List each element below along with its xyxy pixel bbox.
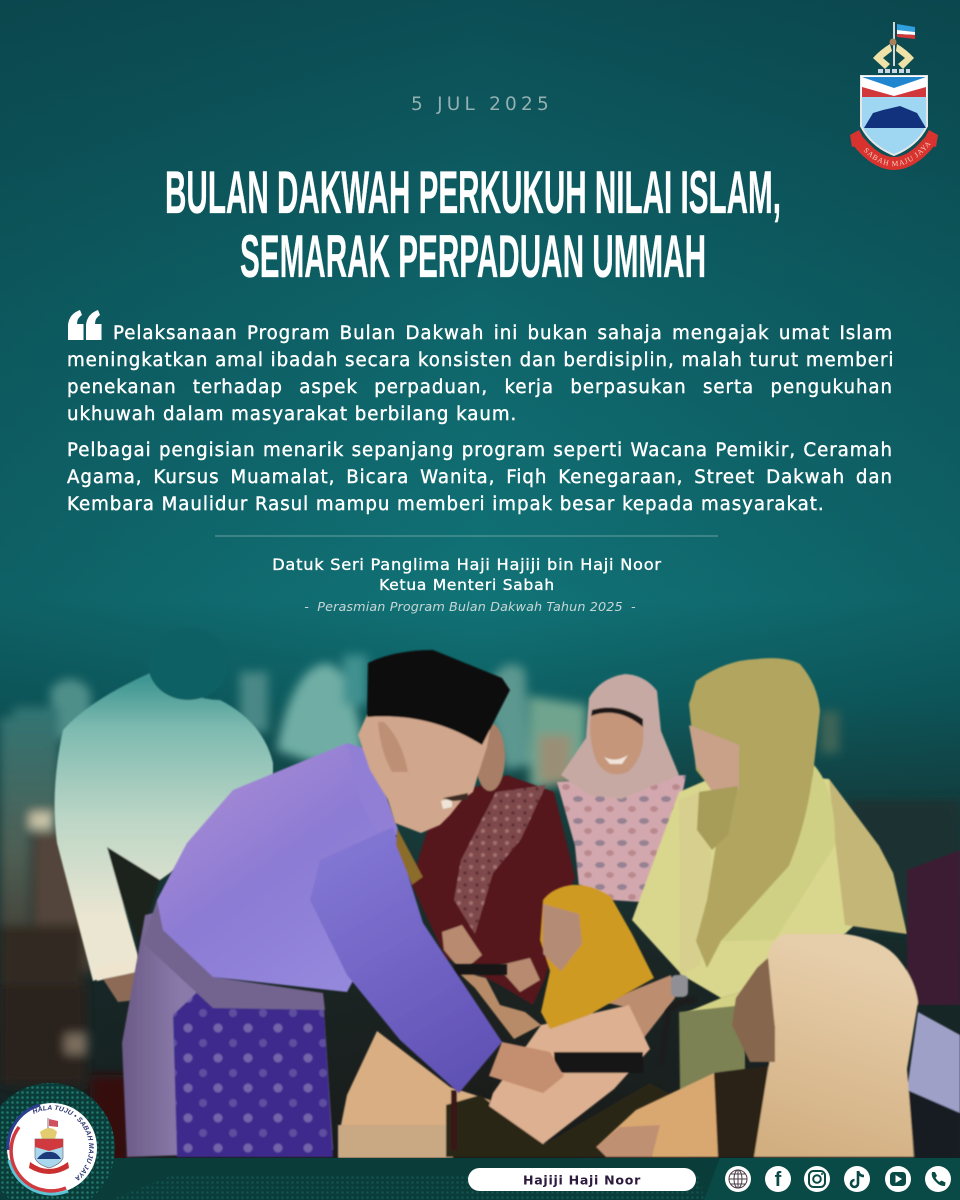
icon: instagram — [804, 1166, 830, 1192]
name pill: Hajiji Haji Noor — [523, 1172, 641, 1188]
tinted crowd in the background — [0, 655, 960, 1165]
title — [165, 159, 781, 290]
icon: facebook — [765, 1166, 791, 1192]
lady in green-yellow hijab — [604, 658, 907, 1075]
icon: globe — [725, 1166, 751, 1192]
quote text: penekanan terhadap aspek perpaduan, kerja berpasukan serta pengukuhan — [67, 377, 893, 398]
icon: youtube — [885, 1166, 911, 1192]
attribution: Ketua Menteri Sabah — [379, 576, 555, 594]
quotation mark — [68, 310, 102, 340]
quote text: Pelbagai pengisian menarik sepanjang program seperti Wacana Pemikir, Ceramah — [67, 440, 893, 461]
footer bar — [0, 1158, 960, 1200]
attribution: Datuk Seri Panglima Haji Hajiji bin Haji Noor — [272, 555, 662, 574]
name pill — [468, 1168, 696, 1191]
minister head and songkok — [358, 650, 510, 833]
date: 5 JUL 2025 — [411, 94, 553, 115]
attribution: - Perasmian Program Bulan Dakwah Tahun 2025 - — [304, 600, 636, 615]
minister body: sarong, shirt, arm — [122, 743, 564, 1157]
lady in maroon — [411, 723, 575, 1005]
coat of arms of Sabah: SABAH MAJU JAYA — [864, 142, 931, 166]
quote text — [66, 323, 894, 515]
quote text: Agama, Kursus Muamalat, Bicara Wanita, Fiqh Kenegaraan, Street Dakwah dan — [67, 467, 893, 488]
elderly lady at right — [596, 850, 960, 1157]
icon: phone — [925, 1166, 951, 1192]
badge: Hala Tuju Sabah Maju Jaya — [0, 1083, 115, 1199]
quote text: meningkatkan amal ibadah secara konsisten dan berdisiplin, malah turut memberi — [67, 350, 894, 371]
quote text: Pelaksanaan Program Bulan Dakwah ini bukan sahaja mengajak umat Islam — [113, 323, 893, 344]
elderly lady in wheelchair — [338, 885, 745, 1158]
icon: facebook: f — [775, 1169, 782, 1191]
quote text: ukhuwah dalam masyarakat berbilang kaum. — [67, 404, 517, 425]
attribution — [272, 555, 662, 615]
coat of arms of Sabah — [850, 22, 938, 170]
quote text: Kembara Maulidur Rasul mampu memberi impak besar kepada masyarakat. — [67, 494, 825, 515]
badge: Hala Tuju Sabah Maju Jaya: HALA TUJU • SABAH MAJU JAYA — [32, 1105, 94, 1180]
quote divider — [215, 535, 718, 537]
lady in pink — [557, 674, 686, 903]
icon: tiktok — [844, 1166, 870, 1192]
man in white shirt — [55, 628, 273, 1002]
